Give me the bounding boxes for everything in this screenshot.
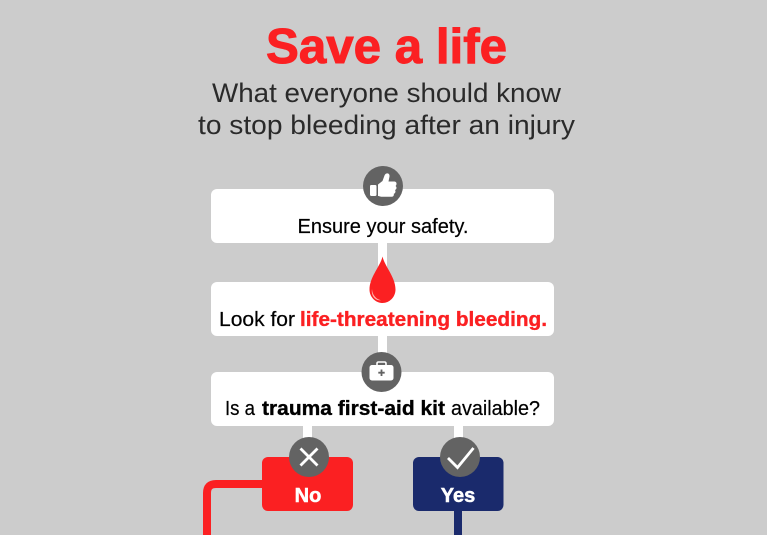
panel: No (262, 457, 353, 511)
subtitle: to stop bleeding after an injury (198, 110, 576, 140)
No label: No (295, 485, 321, 507)
subtitle (198, 78, 576, 140)
step 2 text: life-threatening bleeding. (300, 309, 547, 331)
connector: step 1 to step 2 (378, 240, 387, 285)
connector: step 3 to No (303, 423, 312, 443)
step 1 text: Ensure your safety. (298, 216, 468, 238)
step 3 text: trauma first-aid kit (262, 398, 445, 420)
panel: ensure safety (211, 189, 554, 243)
step 3 text: Is a (225, 398, 256, 420)
subtitle: What everyone should know (212, 78, 562, 108)
connector: step 3 to Yes (454, 423, 463, 443)
panel: trauma kit question (211, 372, 554, 426)
step 3 text: available? (451, 398, 540, 420)
step 2 text: Look for (219, 309, 295, 331)
icon: cross (289, 437, 329, 477)
icon: blood drop (370, 256, 396, 303)
icon: thumbs up (363, 166, 403, 206)
title: Save a life (266, 20, 507, 74)
arrow: navy path from Yes (454, 509, 462, 535)
panel: look for bleeding (211, 282, 554, 336)
connector: step 2 to step 3 (378, 333, 387, 375)
icon: first-aid kit (362, 352, 402, 392)
Yes label: Yes (441, 485, 475, 507)
icon: check mark (440, 437, 480, 477)
arrow: red path from No (207, 484, 264, 535)
panel: Yes (413, 457, 504, 511)
